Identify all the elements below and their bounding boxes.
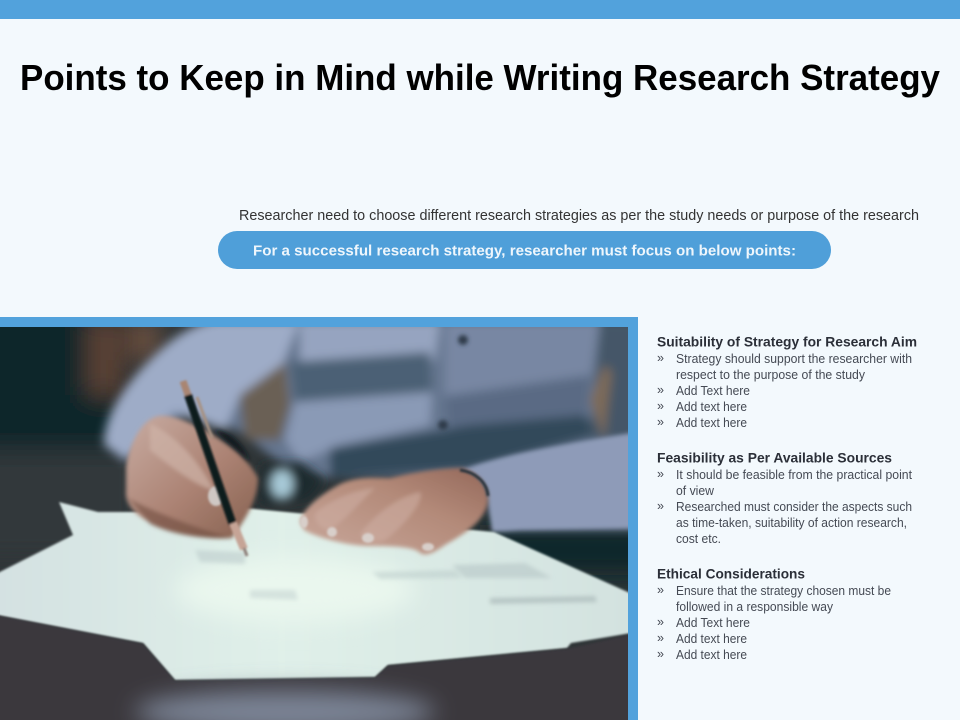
- section: feasibility: »: [657, 467, 664, 481]
- dark background: [0, 327, 628, 586]
- callout pill: [218, 231, 831, 269]
- section: suitability of strategy: »: [657, 415, 664, 429]
- section: ethical considerations: followed in a responsible way: [676, 600, 834, 614]
- section: feasibility: of view: [676, 484, 715, 498]
- section: ethical considerations: Add text here: [676, 648, 747, 662]
- section: ethical considerations: Add Text here: [676, 616, 750, 630]
- section: ethical considerations: »: [657, 647, 664, 661]
- cuff shadow: [460, 470, 488, 496]
- section: suitability of strategy: Add text here: [676, 416, 747, 430]
- top accent bar: [0, 0, 960, 19]
- shirt: [104, 320, 650, 530]
- photo: hands writing on paper: [0, 327, 628, 720]
- section: ethical considerations: »: [657, 583, 664, 597]
- section: suitability of strategy: Suitability of Strategy for Research Aim: [657, 334, 917, 350]
- second hand: [300, 468, 488, 554]
- section: suitability of strategy: Strategy should support the researcher with: [676, 352, 912, 366]
- section: feasibility: [657, 450, 913, 546]
- section: feasibility: It should be feasible from the practical point: [676, 468, 913, 482]
- intro sentence: Researcher need to choose different research strategies as per the study needs or purpose of the research: [239, 208, 919, 224]
- callout pill: For a successful research strategy, researcher must focus on below points:: [253, 244, 796, 260]
- section: suitability of strategy: »: [657, 383, 664, 397]
- thumb nail: [208, 486, 224, 506]
- shirt cuff: [214, 430, 250, 462]
- paper writing: [195, 550, 597, 604]
- section: feasibility: »: [657, 499, 664, 513]
- section: feasibility: Feasibility as Per Available Sources: [657, 450, 892, 466]
- hand with pen: [126, 416, 258, 538]
- section: feasibility: as time-taken, suitability of action research,: [676, 516, 907, 530]
- section: suitability of strategy: [657, 334, 917, 430]
- photo frame: [0, 317, 638, 720]
- section: ethical considerations: Ethical Considerations: [657, 566, 805, 582]
- section: ethical considerations: [657, 566, 891, 662]
- section: suitability of strategy: »: [657, 399, 664, 413]
- section: suitability of strategy: Add Text here: [676, 384, 750, 398]
- pen: [183, 381, 247, 556]
- section: suitability of strategy: Add text here: [676, 400, 747, 414]
- bottom table: [0, 612, 650, 720]
- section: ethical considerations: Ensure that the strategy chosen must be: [676, 584, 891, 598]
- section: feasibility: Researched must consider the aspects such: [676, 500, 912, 514]
- section: suitability of strategy: »: [657, 351, 664, 365]
- finger nails: [300, 516, 434, 551]
- title: Points to Keep in Mind while Writing Research Strategy: [20, 57, 940, 98]
- section: suitability of strategy: respect to the purpose of the study: [676, 368, 866, 382]
- paper: [0, 502, 650, 680]
- section: ethical considerations: »: [657, 615, 664, 629]
- panel: key points list: [657, 334, 917, 662]
- section: ethical considerations: »: [657, 631, 664, 645]
- section: ethical considerations: Add text here: [676, 632, 747, 646]
- section: feasibility: cost etc.: [676, 532, 721, 546]
